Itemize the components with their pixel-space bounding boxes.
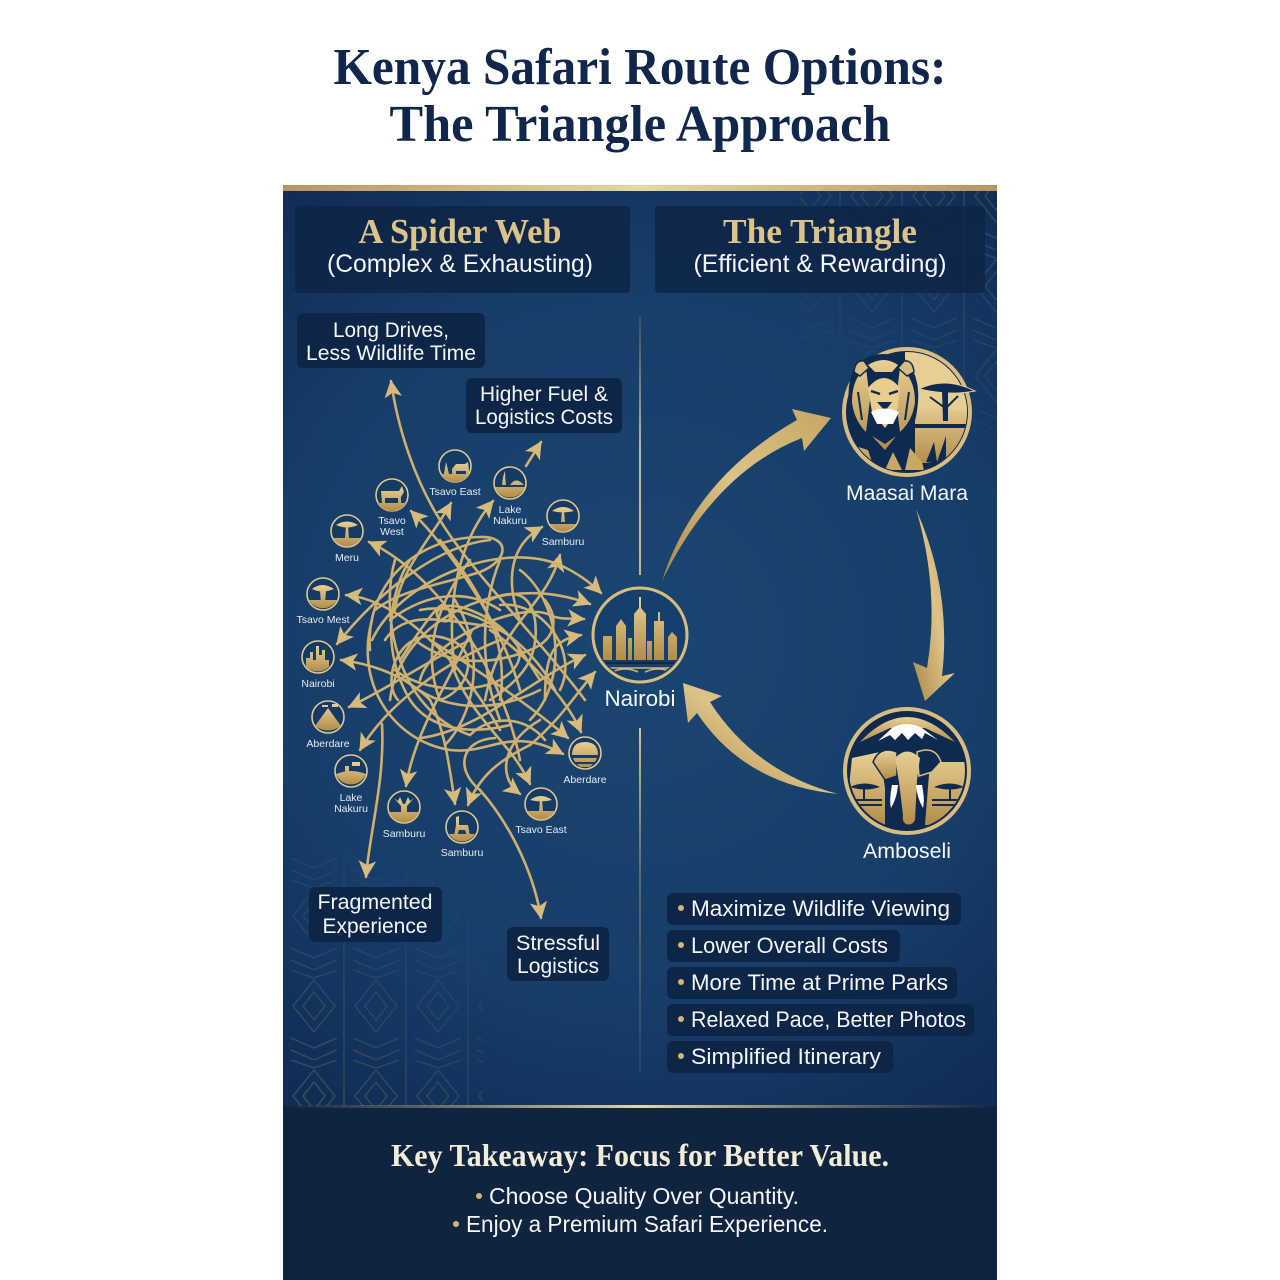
callout: Long Drives: Less Wildlife Time <box>306 341 476 365</box>
heading: The Triangle: The Triangle <box>723 212 917 251</box>
heading: A Spider Web: (Complex & Exhausting) <box>327 250 593 278</box>
park icon: Lake Nakuru top: Lake <box>499 504 522 516</box>
main navy panel <box>283 185 997 1106</box>
park icon: Lake Nakuru top: Nakuru <box>493 515 527 527</box>
park icon: Lake Nakuru lower: Nakuru <box>334 803 368 815</box>
benefits list <box>667 893 974 1073</box>
heading: A Spider Web: A Spider Web <box>358 212 562 251</box>
park icon: Nairobi small: Nairobi <box>301 678 335 690</box>
park icon: Meru <box>331 515 363 564</box>
park icon: Tsavo West: West <box>380 526 404 538</box>
label: Amboseli: Amboseli <box>863 840 951 863</box>
park icon: Tsavo East lower <box>515 788 567 836</box>
park icon: Tsavo Mest <box>296 578 350 626</box>
callout: Fragmented Experience: Fragmented <box>318 890 432 914</box>
arrow: Maasai Mara to Amboseli <box>913 509 955 701</box>
park icon: Samburu deer <box>383 791 425 840</box>
label: Nairobi: Nairobi <box>604 686 676 711</box>
arrow: Nairobi to Maasai Mara <box>662 409 831 581</box>
callout: Fragmented Experience: Experience <box>322 914 428 938</box>
park icon: Lake Nakuru top <box>493 467 527 527</box>
park icon: Samburu top right <box>542 500 584 548</box>
label: Maasai Mara: Maasai Mara <box>846 482 968 505</box>
park icon: Aberdare right <box>563 737 607 786</box>
park icon: Aberdare left: Aberdare <box>306 738 350 750</box>
park icon: Tsavo East top: Tsavo East <box>429 486 481 498</box>
park icon: Tsavo West <box>376 479 408 538</box>
callout: Higher Fuel: Higher Fuel & <box>480 382 608 406</box>
title: Kenya Safari Route Options: <box>334 39 946 96</box>
key takeaway text: Key Takeaway: Focus for Better Value. <box>391 1137 889 1173</box>
park icon: Tsavo East lower: Tsavo East <box>515 824 567 836</box>
park icon: Aberdare left <box>306 701 350 750</box>
key takeaway text: Enjoy a Premium Safari Experience. <box>466 1211 828 1237</box>
callout: Stressful Logistics: Stressful <box>516 931 600 955</box>
benefit: Lower Overall Costs <box>667 930 900 962</box>
park icon: Samburu gazelle <box>441 811 483 859</box>
callout: Fragmented Experience <box>309 887 442 942</box>
benefit: Maximize Wildlife Viewing: Maximize Wildlife Viewing <box>691 896 950 921</box>
heading: The Triangle: (Efficient & Rewarding) <box>694 250 946 278</box>
benefit: Maximize Wildlife Viewing <box>667 893 961 925</box>
title <box>334 39 946 153</box>
spider web tangle of routes <box>337 381 601 918</box>
park icon: Tsavo East top <box>429 450 481 498</box>
benefit: Lower Overall Costs: Lower Overall Costs <box>691 933 888 958</box>
callout: Stressful Logistics <box>507 927 609 981</box>
arrow: Amboseli to Nairobi <box>683 683 838 794</box>
key takeaway text: Choose Quality Over Quantity. <box>489 1183 799 1209</box>
heading: The Triangle <box>655 206 985 293</box>
hub icon: Nairobi skyline <box>593 588 687 682</box>
park icon: Lake Nakuru lower: Lake <box>340 792 363 804</box>
park icon: Samburu gazelle: Samburu <box>441 847 483 859</box>
callout: Higher Fuel <box>466 378 622 433</box>
benefit: Simplified Itinerary <box>667 1041 893 1073</box>
park icon: Nairobi small <box>301 641 335 690</box>
callout: Long Drives: Long Drives, <box>333 318 449 342</box>
park icon: Tsavo West: Tsavo <box>378 515 406 527</box>
heading: A Spider Web <box>295 206 630 293</box>
callout: Long Drives <box>297 313 485 368</box>
callout: Higher Fuel: Logistics Costs <box>475 405 613 429</box>
benefit: Relaxed Pace, Better Photos: Relaxed Pace, Better Photos <box>691 1007 966 1032</box>
hub icon: Maasai Mara lion <box>842 347 975 477</box>
title: The Triangle Approach <box>390 96 891 153</box>
park icon: Meru: Meru <box>335 552 359 564</box>
gold top bar <box>283 185 997 191</box>
park icon: Samburu top right: Samburu <box>542 536 584 548</box>
benefit: More Time at Prime Parks: More Time at Prime Parks <box>691 970 948 995</box>
callout: Stressful Logistics: Logistics <box>517 954 599 978</box>
park icon: Samburu deer: Samburu <box>383 828 425 840</box>
hub icon: Amboseli elephant <box>843 707 971 835</box>
benefit: Simplified Itinerary: Simplified Itinerary <box>691 1044 882 1069</box>
park icon: Tsavo Mest: Tsavo Mest <box>296 614 350 626</box>
footer band <box>283 1106 997 1280</box>
key takeaway text <box>391 1137 889 1237</box>
park icon: Aberdare right: Aberdare <box>563 774 607 786</box>
park icon: Lake Nakuru lower <box>334 755 368 815</box>
